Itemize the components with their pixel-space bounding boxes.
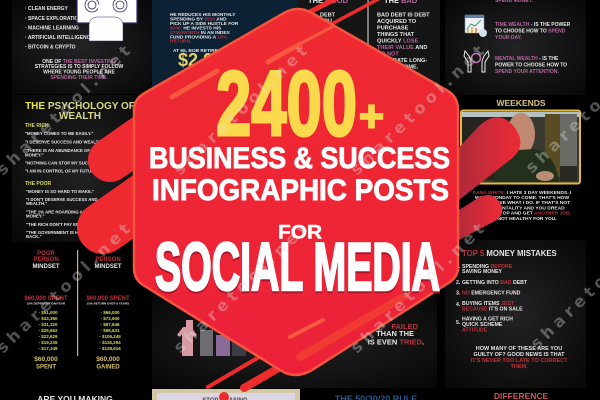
watermarks: sharetool.net	[347, 219, 488, 357]
mistakes list: ATTITUDE	[462, 328, 488, 334]
poor beliefs: "THE GOVERNMENT IS HOLDING ME	[26, 230, 103, 235]
rich column: - $106,249	[99, 334, 121, 339]
panel: poor vs rich mindset	[24, 250, 130, 370]
closing question: GUILTY OF? GOOD NEWS IS THAT	[473, 352, 565, 358]
poor beliefs: "THE 1% ARE HOARDING ALL THE	[26, 210, 98, 214]
mistakes list: 1.	[456, 264, 461, 270]
time wealth text: YOUR DAY.	[495, 35, 522, 41]
poor column: $60,000	[34, 356, 58, 363]
mistakes list	[456, 264, 528, 334]
icon: hands holding brain	[464, 51, 489, 72]
rich beliefs: "MONEY COMES TO ME EASILY."	[25, 131, 93, 136]
quote text: YOUR MENTALITY AND YOU DREAD	[479, 205, 565, 211]
list of trends: · CLEAN ENERGY	[25, 6, 68, 12]
poor column: - $43,350	[38, 316, 58, 321]
mistakes list: 5.	[456, 320, 461, 326]
chart: people bars	[177, 320, 246, 356]
rich beliefs	[25, 123, 105, 174]
rich beliefs: "I DESERVE SUCCESS AND WEALTH."	[25, 140, 105, 144]
red stripes behind badge	[208, 0, 384, 388]
panel: bad debt: QUICKLY LOSE	[377, 38, 419, 44]
small red dot	[219, 392, 229, 400]
panel: bad debt: THINGS THAT	[377, 32, 415, 38]
watermarks: sharetool.net	[347, 41, 488, 179]
panel: bad debt	[368, 0, 440, 96]
poor beliefs: BACK."	[26, 234, 42, 239]
panel: bad debt: TERM INCOME.	[377, 64, 419, 70]
rich beliefs: "THERE IS AN ABUNDANCE OF	[25, 148, 90, 153]
investing tip	[35, 59, 123, 81]
rich column	[86, 257, 130, 370]
poor beliefs: WEALTH."	[26, 201, 47, 206]
panel: wealth types	[445, 0, 586, 95]
poor column: PERSON	[33, 257, 59, 263]
rich column: MINDSET	[94, 264, 122, 270]
list of trends: · SPACE EXPLORATION	[25, 16, 82, 22]
panel: Bob's retirement: SPENDING BY $500 AND	[170, 16, 227, 22]
mistakes list: SPENDING BEFORE	[462, 264, 513, 270]
failure text: IS EVEN TRIED.	[368, 338, 424, 346]
investing tip: STRATEGIES IS TO SIMPLY FOLLOW	[35, 64, 123, 70]
headline line: for: FOR	[278, 222, 322, 244]
watermarks: sharetool.net	[170, 219, 311, 357]
panel: good debt: YOU	[320, 18, 332, 24]
psychology title: WEALTH	[59, 111, 101, 122]
panel: bad debt: ACQUIRED TO	[377, 19, 417, 25]
poor column: - $51,000	[38, 310, 58, 315]
rich column: - $128,616	[99, 346, 121, 351]
list of trends	[25, 6, 94, 50]
panel: bad debt: PURCHASE	[377, 26, 409, 32]
mistakes list: NO EMERGENCY FUND	[462, 290, 521, 296]
mistakes list: 4.	[456, 302, 461, 308]
closing question: IT'S NEVER TOO LATE TO CORRECT	[471, 358, 568, 364]
mistakes title: TOP 5 MONEY MISTAKES	[462, 249, 557, 258]
panel: Bob's retirement: PICK UP A SIDE HUSTLE FOR	[170, 21, 239, 27]
investing tip: SPENDING THEIR TIME.	[50, 75, 108, 81]
mistakes list: BECAUSE IT'S ON SALE	[462, 306, 523, 312]
watermarks	[0, 39, 600, 357]
icon: person at screen	[77, 0, 137, 41]
closing question: THEM.	[510, 364, 528, 370]
rich column: - $72,600	[100, 316, 120, 321]
quote text: IT'S NOT HEALTHY FOR YOU.	[487, 216, 557, 222]
poor beliefs: MONEY."	[26, 214, 45, 218]
mistakes list: 3.	[456, 290, 461, 296]
rich column: PERSON	[95, 257, 121, 263]
rich column: - $87,846	[100, 322, 120, 327]
headline plus sign: +	[359, 92, 384, 141]
investing tip: ONE OF THE BEST INVESTING	[42, 59, 116, 65]
headline 2400+ digits: 2400	[216, 53, 357, 155]
panel: bad debt: GENERATE LONG-	[377, 58, 427, 64]
quote text: WANT MONDAY TO COME. THAT'S HOW	[475, 195, 569, 201]
poor column: - $31,320	[38, 322, 58, 327]
quote text: MUCH I LOVE WHAT I DO. IF THAT'S NOT	[474, 200, 570, 206]
poor column: $60,000 SPENT	[24, 296, 68, 302]
quote text	[473, 190, 572, 222]
rich column: $60,000 SPENT	[86, 296, 130, 302]
poor beliefs	[25, 181, 105, 239]
panel: Bob's retirement: $2.0	[178, 50, 213, 70]
poor column: SPENT	[36, 364, 56, 370]
panel: top 5 money mistakes	[445, 240, 586, 388]
panel: Bob's retirement	[152, 0, 298, 96]
psychology title	[25, 101, 135, 122]
mistakes list: 2.	[456, 280, 461, 286]
panel: bad debt: THEIR VALUE AND	[377, 45, 427, 51]
rich column: - $116,294	[99, 340, 121, 345]
panel: Bob's retirement: FUND PROVIDING A 10%	[170, 34, 228, 40]
closing question: HOW MANY OF THESE ARE YOU	[476, 346, 562, 352]
panel: Bob's retirement: HE REDUCES HIS MONTHLY	[170, 12, 236, 18]
poor column: - $19,235	[38, 340, 58, 345]
time wealth text: TIME WEALTH - IS THE POWER	[495, 22, 571, 28]
poor beliefs: "MONEY IS SO HARD TO MAKE."	[26, 189, 94, 194]
time wealth text	[495, 22, 571, 41]
mistakes list: BUYING ITEMS JUST	[462, 301, 515, 307]
psychology title: THE PSYCHOLOGY OF	[25, 101, 135, 112]
panel: Bob's retirement: AT 65, BOB RETIRES	[173, 48, 222, 54]
poor column: - $22,629	[38, 334, 58, 339]
rich column: $60,000	[96, 356, 120, 363]
watermarks: sharetool.net	[170, 41, 311, 179]
rich column: - $66,000	[100, 310, 120, 315]
panel: quote frame	[152, 389, 300, 400]
mistakes list: HAVING A GET RICH	[462, 316, 513, 322]
panel: bad debt: DO NOT	[377, 52, 399, 58]
time wealth text: TO CHOOSE HOW TO SPEND	[495, 28, 566, 34]
stripe on badge edge	[300, 296, 405, 357]
rich column: GAINED	[96, 364, 120, 370]
list of trends: · MACHINE LEARNING	[25, 26, 79, 32]
rich beliefs: THE RICH:	[25, 123, 51, 129]
poor column: - $17,349	[38, 346, 58, 351]
panel: trends to invest	[12, 0, 152, 94]
rich column: - $96,631	[100, 328, 120, 333]
panel: Bob's retirement: $200. HE INVESTS HIS	[170, 26, 222, 32]
inner highlight stripes	[172, 27, 332, 337]
poor beliefs: "I DON'T DESERVE SUCCESS AND	[26, 197, 98, 202]
panel: Bob's retirement: $700/MONTH IN AN INDEX	[170, 30, 231, 36]
panel: psychology of wealth	[12, 95, 152, 242]
quote text: DANA WHITE: I HATE 3 DAY WEEKENDS. I	[473, 190, 572, 196]
headline line: business and success: BUSINESS & SUCCESS	[149, 142, 450, 175]
poor column	[24, 251, 68, 370]
headline line: infographic posts: INFOGRAPHIC POSTS	[152, 174, 449, 207]
panel: Bob's retirement: RETURN.	[170, 38, 191, 44]
list of trends: · BITCOIN & CRYPTO	[25, 44, 76, 50]
poor column: 10% DEPRECIATION/YEAR	[27, 302, 66, 306]
rich beliefs: "NOTHING CAN STOP MY SUCCESS."	[25, 160, 103, 166]
poor column: MINDSET	[32, 264, 60, 270]
mental wealth text: MENTAL WEALTH - IS THE	[495, 56, 559, 62]
mental wealth text	[495, 56, 567, 75]
hexagon badge	[134, 9, 458, 375]
investing tip: WHERE YOUNG PEOPLE ARE	[43, 70, 115, 76]
poor column: - $26,662	[38, 328, 58, 333]
photo frame	[461, 110, 580, 184]
panel: bad debt: BAD DEBT IS DEBT	[377, 12, 430, 18]
poor beliefs: "THE RICH DON'T PAY ENOUGH TAX."	[26, 222, 105, 227]
poor beliefs: THE POOR	[25, 181, 52, 187]
panel: good debt	[298, 0, 368, 60]
mistakes list: QUICK SCHEME	[462, 322, 503, 328]
rich beliefs: MONEY."	[25, 152, 44, 158]
failure text: FAILED	[391, 322, 419, 331]
panel: dana white quote	[461, 98, 580, 222]
list of trends: · ARTIFICIAL INTELLIGENCE	[25, 35, 94, 41]
mental wealth text: SPEND YOUR ATTENTION.	[495, 69, 559, 75]
right red pills	[440, 117, 520, 250]
panel: good debt: IS	[337, 32, 343, 38]
heading: weekends: WEEKENDS	[496, 98, 546, 108]
failure text	[368, 322, 424, 346]
closing question	[471, 346, 568, 370]
quote text: MONDAY, STOP AND GET ANOTHER JOB.	[473, 211, 572, 217]
panel: good debt: DEBT	[320, 12, 336, 18]
mental wealth text: POWER TO CHOOSE HOW TO	[495, 62, 567, 68]
panel: failure	[152, 290, 437, 388]
failure text: THAN THE	[376, 329, 414, 338]
mistakes list: SAVING MONEY	[462, 269, 503, 275]
rich beliefs: "I AM IN CONTROL OF MY FUTURE."	[25, 168, 100, 174]
rich column: 10% RETURN OVER 8 YEARS	[87, 302, 129, 306]
icon: chart on screen	[465, 15, 487, 37]
mistakes list: GETTING INTO BAD DEBT	[462, 280, 528, 286]
left red pills	[103, 125, 160, 228]
poor column: POOR	[37, 251, 56, 257]
